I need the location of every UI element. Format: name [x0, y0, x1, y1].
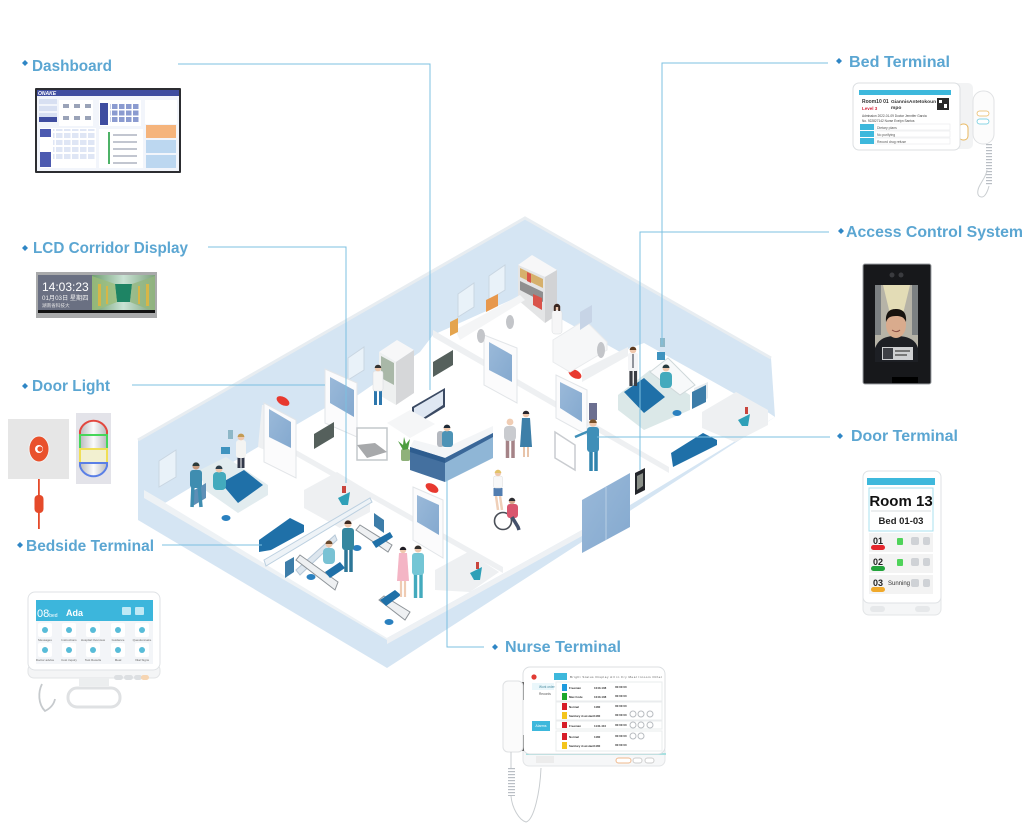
callout line: Bedside Terminal: [162, 544, 262, 546]
device: bedside terminal: Cost inquiry: [61, 658, 77, 662]
device: bedside terminal: Questionnaire: [133, 638, 152, 642]
device: nurse terminal: Normal: [569, 705, 579, 709]
device: bedside terminal: Test Results: [85, 658, 102, 662]
doors: [264, 335, 630, 558]
beds: [191, 358, 708, 513]
device: bedside terminal: Doctor advice: [36, 658, 55, 662]
device: bed terminal: Room10 01: [862, 99, 889, 105]
device: door terminal: Room 13: [869, 493, 933, 510]
device: door terminal: 02: [873, 557, 883, 567]
device: bedside terminal: Meal: [115, 658, 122, 662]
device: bedside terminal: Hospital Overview: [81, 638, 106, 642]
building base: [138, 218, 775, 668]
device: door terminal: [863, 471, 941, 615]
callout line: Door Terminal: [597, 436, 830, 438]
windows: [159, 265, 505, 487]
device: nurse terminal: 1180: [594, 705, 601, 709]
device: door terminal: Bed 01-03: [879, 516, 923, 527]
device: door light call button and indicator: [8, 413, 111, 529]
device: nurse terminal: 00:00:00: [615, 685, 627, 689]
device: nurse terminal: 00:00:00: [615, 704, 627, 708]
device: nurse terminal: 1180: [594, 735, 601, 739]
device: LCD corridor display: 01月03日 星期四: [42, 294, 88, 302]
stools: [222, 410, 682, 625]
device: nurse terminal: 00:00:00: [615, 713, 627, 717]
device: bedside terminal: Vital Signs: [135, 658, 150, 662]
device: door terminal: Sunning: [888, 581, 910, 587]
label: Dashboard: Dashboard: [32, 58, 112, 75]
device: nurse terminal: Sanitary Assistant: [569, 744, 594, 748]
door lights: [275, 367, 583, 495]
label: Access Control System: Access Control System: [846, 224, 1023, 241]
ward benches: [264, 498, 410, 620]
device: nurse terminal: Freeman: [569, 686, 581, 690]
label: LCD Corridor Display: LCD Corridor Display: [33, 240, 188, 257]
device: bedside terminal: 08bed: [37, 608, 58, 620]
callout line: Door Light: [132, 384, 325, 386]
device: nurse terminal: 00:00:00: [615, 694, 627, 698]
screens: [314, 350, 645, 495]
device: bedside terminal: [28, 592, 160, 711]
device: nurse terminal: 1180: [594, 714, 601, 718]
device: bed terminal: Dietary plans: [877, 126, 897, 130]
label: Nurse Terminal: Nurse Terminal: [505, 639, 621, 656]
callout line: Nurse Terminal: [447, 480, 484, 647]
device: LCD corridor display: 14:03:23: [42, 280, 89, 294]
plant: [398, 437, 410, 450]
device: bedside terminal: Ada: [66, 608, 84, 618]
device: bed terminal: Admission 2022-01-09 Doctor Jennifer Garcia: [862, 114, 927, 118]
device: bedside terminal: Instructions: [61, 638, 77, 642]
bookshelf: [518, 255, 557, 323]
callout line: Bed Terminal: [662, 63, 828, 345]
device: nurse terminal: 00:00:00: [615, 743, 627, 747]
device: LCD corridor display: 湖南省科技大: [42, 302, 70, 309]
callout line: Access Control System: [640, 232, 829, 470]
callout line: Dashboard: [178, 64, 430, 390]
device: nurse terminal: 00:00:00: [615, 734, 627, 738]
pharmacy cabinet: [379, 340, 414, 405]
device: dashboard screen: ONAKE: [38, 91, 57, 97]
partition walls: [258, 330, 768, 592]
IV stands and sinks: [221, 338, 750, 580]
device: nurse terminal: 1180: [594, 744, 601, 748]
device: nurse terminal: 1040-108: [594, 695, 607, 699]
label: Door Terminal: Door Terminal: [851, 428, 958, 445]
device: door terminal: 01: [873, 536, 883, 546]
reception desk: [410, 426, 493, 482]
device: nurse terminal: 00:00:00: [615, 723, 627, 727]
device: bed terminal: Record drug refuse: [877, 140, 906, 144]
device: door terminal: 03: [873, 578, 883, 588]
device: bed terminal: mpo: [891, 106, 901, 111]
device: nurse terminal: Records: [539, 692, 551, 696]
device: bedside terminal: Guidance: [112, 638, 125, 642]
device: LCD corridor display: [36, 272, 157, 318]
label: Bedside Terminal: Bedside Terminal: [26, 538, 154, 555]
device: bed terminal: No purifying: [877, 133, 895, 137]
device: nurse terminal: Sanitary Assistant: [569, 714, 594, 718]
label: Bed Terminal: Bed Terminal: [849, 54, 950, 71]
callout line: LCD Corridor Display: [208, 247, 346, 483]
device: nurse terminal: [503, 667, 666, 822]
device: bed terminal: No. 922827142 Nurse Evelyn Santos: [862, 119, 915, 123]
device: nurse terminal: Max Code: [569, 695, 583, 699]
device: nurse terminal: Normal: [569, 735, 579, 739]
device: access control panel: [863, 264, 931, 384]
device: nurse terminal: Work order: [539, 685, 556, 689]
device: nurse terminal: 1140-410: [594, 724, 606, 728]
people: [190, 304, 672, 598]
floor plan illustration: [138, 218, 775, 668]
sofas: [259, 433, 717, 552]
device: nurse terminal: 1040-108: [594, 686, 607, 690]
device: bed terminal: GiannisAntetokoun: [891, 99, 936, 105]
furniture: [357, 255, 607, 470]
device: nurse terminal: Freeman: [569, 724, 581, 728]
label: Door Light: Door Light: [32, 378, 111, 395]
device: nurse terminal: Alarms: [535, 724, 547, 728]
device: bed terminal: [853, 83, 994, 197]
device: dashboard screen: [35, 88, 181, 173]
device: nurse terminal: Bright Status Display All in Fry Meal Inroom Other: [570, 675, 662, 679]
device: bedside terminal: Messages: [38, 638, 52, 642]
white floor: [165, 296, 775, 638]
device: bed terminal: Level 3: [862, 106, 878, 111]
